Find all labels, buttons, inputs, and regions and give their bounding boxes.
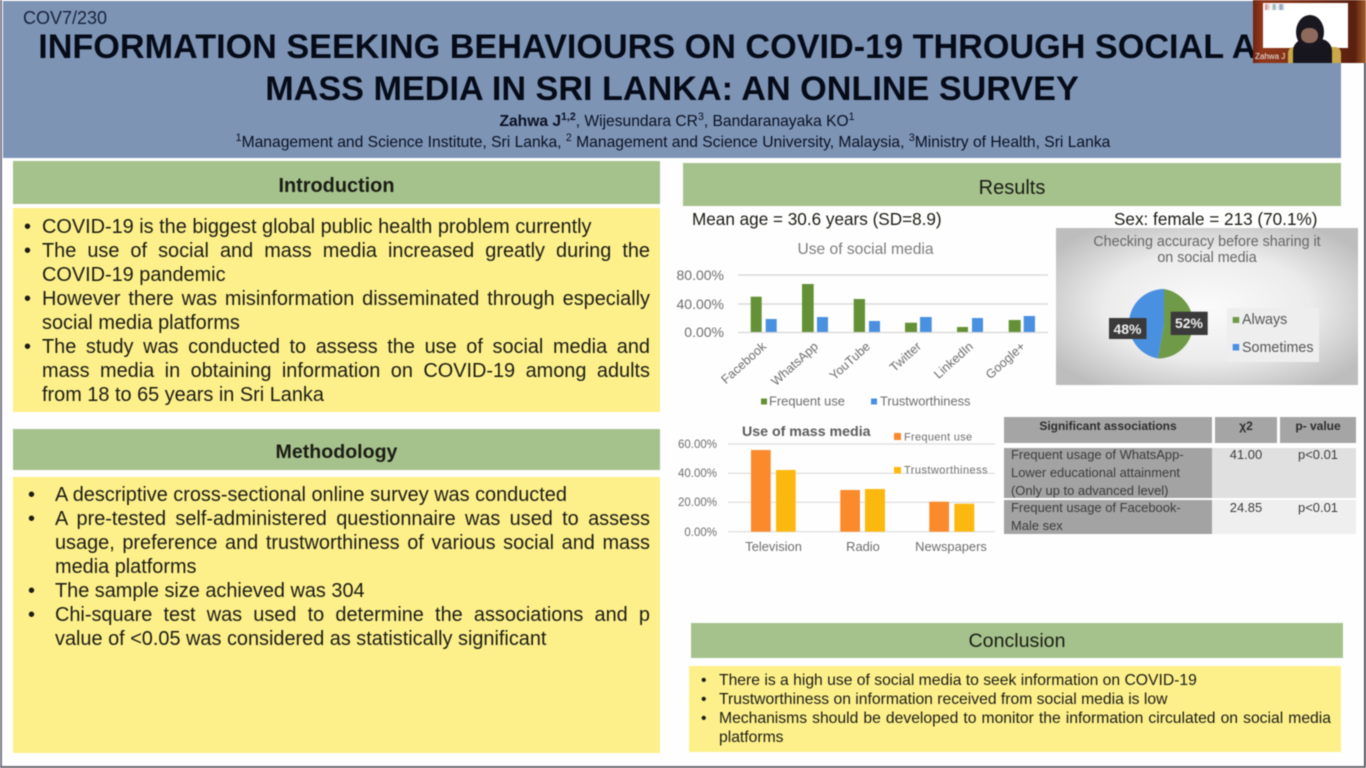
panel: introduction heading xyxy=(13,161,660,204)
bar chart: use of social media: Facebook xyxy=(719,339,770,387)
pie chart: checking accuracy: Checking accuracy before sharing it xyxy=(1093,234,1321,250)
bottom screen edge xyxy=(0,766,1366,768)
bullet list: social media platforms xyxy=(42,312,240,334)
scarf xyxy=(1293,39,1332,63)
bullet list: Trustworthiness on information received from social media is low xyxy=(719,691,1167,708)
pie chart: checking accuracy: Always xyxy=(1242,312,1287,328)
authors: Zahwa J1,2, Wijesundara CR3, Bandaranayaka KO1 xyxy=(499,111,855,130)
bullet list: COVID-19 is the biggest global public health problem currently xyxy=(42,216,592,238)
panel: results heading: Results xyxy=(979,177,1045,199)
webcam shared slide xyxy=(1263,3,1348,48)
panel: methodology text xyxy=(13,477,660,753)
shoulders xyxy=(1288,47,1341,63)
bullet list: The study was conducted to assess the use of social media and xyxy=(42,336,650,358)
webcam overlay xyxy=(1253,0,1366,63)
panel: conclusion heading xyxy=(691,623,1343,658)
bullet list: The sample size achieved was 304 xyxy=(55,580,365,602)
bar chart: use of social media: LinkedIn xyxy=(931,339,976,382)
bar chart: use of social media: YouTube xyxy=(827,339,873,383)
face xyxy=(1301,28,1318,43)
table: significant associations xyxy=(1004,416,1356,534)
table row: WhatsApp: Lower educational attainment xyxy=(1011,465,1180,480)
panel: conclusion text xyxy=(689,666,1341,752)
bar chart: use of social media: WhatsApp xyxy=(768,339,821,389)
bullet list: • xyxy=(24,336,31,358)
presenter name: Zahwa J xyxy=(1255,52,1285,61)
mean age stat: Mean age = 30.6 years (SD=8.9) xyxy=(692,209,942,229)
bar chart: use of mass media: 0.00% xyxy=(684,527,717,539)
pie chart: checking accuracy: 48% xyxy=(1113,321,1142,337)
bar chart: use of mass media: Television xyxy=(745,539,802,554)
pie chart: checking accuracy xyxy=(1056,227,1358,386)
panel: results heading xyxy=(683,163,1341,206)
bullet list: • xyxy=(701,710,706,727)
bullet list: A descriptive cross-sectional online survey was conducted xyxy=(55,484,567,506)
bullet list: • xyxy=(24,216,31,238)
bullet list: Chi-square test was used to determine the associations and p xyxy=(55,604,650,626)
title: INFORMATION SEEKING BEHAVIOURS ON COVID-19 THROUGH SOCIAL AND xyxy=(38,28,1306,66)
table row: WhatsApp: 41.00 xyxy=(1230,447,1262,462)
affiliations: 1Management and Science Institute, Sri Lanka, 2 Management and Science University, Malaysia, 3Ministry of Health, Sri Lanka xyxy=(236,132,1110,151)
bar chart: use of mass media: Radio xyxy=(846,539,880,554)
bar chart: use of social media: Use of social media xyxy=(797,241,934,258)
panel: methodology heading: Methodology xyxy=(276,441,397,463)
bullet list: • xyxy=(28,604,35,626)
panel: introduction text xyxy=(13,208,660,412)
presenter xyxy=(1287,14,1342,64)
table row: WhatsApp: p<0.01 xyxy=(1298,447,1338,462)
bullet list: • xyxy=(701,691,706,708)
left screen edge xyxy=(0,0,2,768)
bullet list: platforms xyxy=(719,729,784,746)
head xyxy=(1296,15,1324,49)
bullet list: Mechanisms should be developed to monitor the information circulated on social media xyxy=(719,710,1331,727)
table row: Facebook: 24.85 xyxy=(1230,500,1262,515)
bullet list xyxy=(24,216,650,406)
right screen edge xyxy=(1364,60,1366,768)
pie chart: checking accuracy: on social media xyxy=(1157,250,1257,266)
bullet list: However there was misinformation disseminated through especially xyxy=(42,288,650,310)
bullet list: usage, preference and trustworthiness of various social and mass xyxy=(55,532,650,554)
table header row: χ2 xyxy=(1239,419,1253,433)
bar chart: use of mass media xyxy=(678,424,995,554)
bar chart: use of social media: 40.00% xyxy=(677,296,724,312)
table header row: Significant associations xyxy=(1039,419,1177,433)
table header row: p- value xyxy=(1295,419,1341,433)
bullet list: • xyxy=(701,672,706,689)
panel: methodology heading xyxy=(13,429,660,470)
bullet list xyxy=(700,672,1332,746)
table row: WhatsApp: Frequent usage of WhatsApp- xyxy=(1011,447,1184,462)
bullet list: • xyxy=(28,580,35,602)
table row: WhatsApp xyxy=(1004,447,1356,498)
webcam logos xyxy=(1265,4,1285,10)
bullet list: • xyxy=(24,240,31,262)
bar chart: use of social media: Trustworthiness xyxy=(880,394,970,408)
table header row xyxy=(1004,416,1356,444)
table row: Facebook: p<0.01 xyxy=(1298,500,1338,515)
bar chart: use of social media: Google+ xyxy=(983,339,1028,382)
bar chart: use of mass media: 60.00% xyxy=(678,439,717,451)
bar chart: use of mass media: Newspapers xyxy=(915,539,987,554)
bar chart: use of mass media: Frequent use xyxy=(904,432,972,444)
pie chart: checking accuracy: 52% xyxy=(1175,315,1204,331)
bullet list: A pre-tested self-administered questionnaire was used to assess xyxy=(55,508,650,530)
bullet list: COVID-19 pandemic xyxy=(42,264,226,286)
bar chart: use of social media: 0.00% xyxy=(684,324,724,340)
bar chart: use of social media: Frequent use xyxy=(769,394,845,408)
bullet list: from 18 to 65 years in Sri Lanka xyxy=(42,384,324,406)
panel: conclusion heading: Conclusion xyxy=(969,630,1065,652)
bar chart: use of social media: 80.00% xyxy=(677,267,724,283)
panel: introduction heading: Introduction xyxy=(278,175,394,197)
bar chart: use of mass media: 20.00% xyxy=(678,497,717,509)
bullet list: There is a high use of social media to seek information on COVID-19 xyxy=(719,672,1197,689)
bullet list: The use of social and mass media increased greatly during the xyxy=(42,240,650,262)
table row: Facebook xyxy=(1004,500,1356,534)
title: MASS MEDIA IN SRI LANKA: AN ONLINE SURVEY xyxy=(265,70,1079,108)
bar chart: use of mass media: 40.00% xyxy=(678,468,717,480)
bar chart: use of social media xyxy=(676,241,1048,408)
sex stat: Sex: female = 213 (70.1%) xyxy=(1114,209,1317,229)
pie chart: checking accuracy: Sometimes xyxy=(1242,340,1314,356)
bullet list: • xyxy=(24,288,31,310)
table row: Facebook: Male sex xyxy=(1011,518,1063,533)
table row: WhatsApp: (Only up to advanced level) xyxy=(1011,483,1168,498)
bar chart: use of mass media: Use of mass media xyxy=(742,424,871,440)
bullet list: value of <0.05 was considered as statistically significant xyxy=(55,628,546,650)
bullet list xyxy=(28,484,650,650)
bullet list: media platforms xyxy=(55,556,196,578)
poster code: COV7/230 xyxy=(23,8,107,28)
bar chart: use of mass media: Trustworthiness xyxy=(904,464,988,476)
header banner xyxy=(3,1,1341,158)
title xyxy=(38,28,1306,108)
table row: Facebook: Frequent usage of Facebook- xyxy=(1011,500,1181,515)
bullet list: • xyxy=(28,484,35,506)
bullet list: mass media in obtaining information on COVID-19 among adults xyxy=(42,360,650,382)
bullet list: • xyxy=(28,508,35,530)
bar chart: use of social media: Twitter xyxy=(887,339,924,375)
